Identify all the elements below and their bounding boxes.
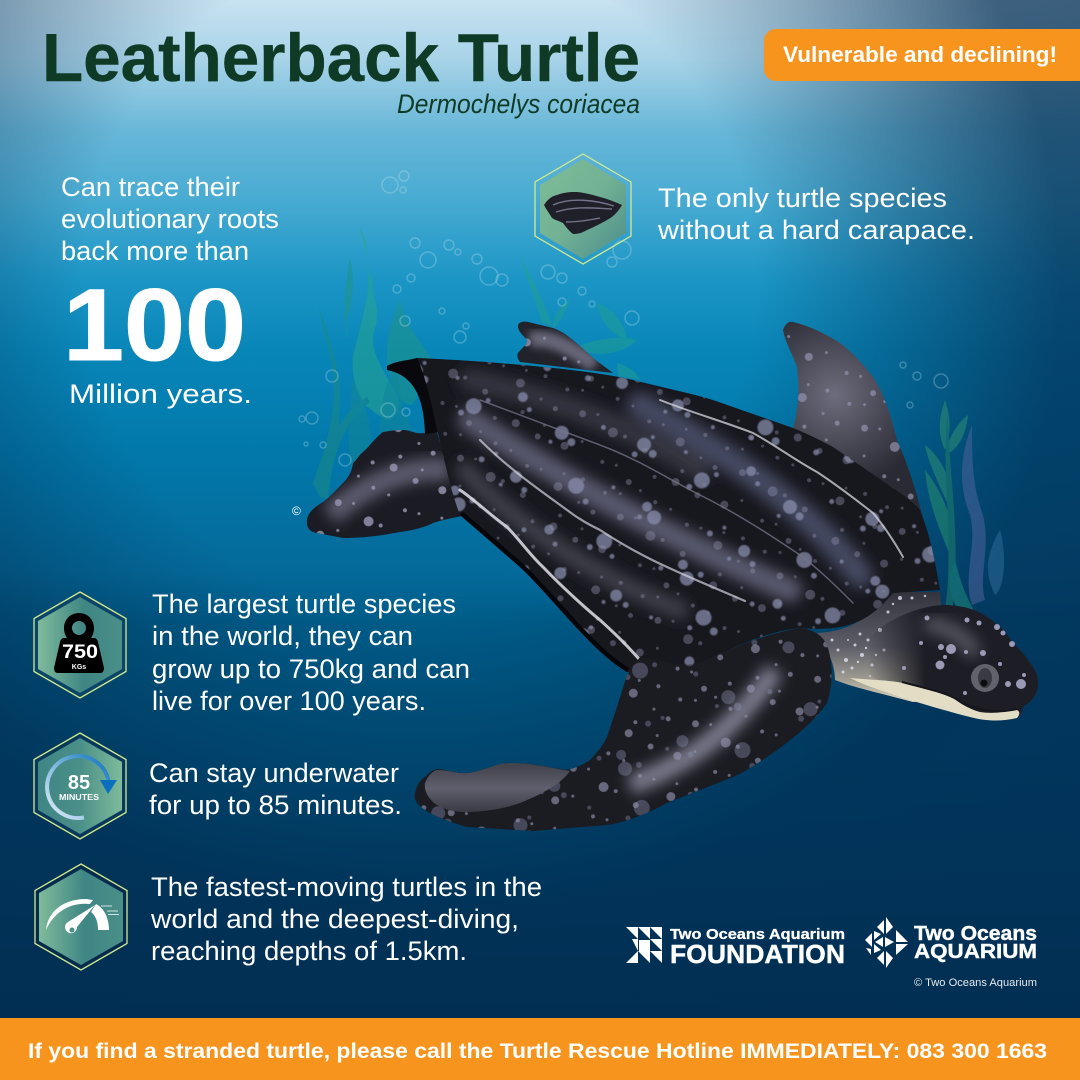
text block: evolutionary roots: [61, 172, 279, 409]
carapace keels: [460, 400, 903, 660]
text block: underwater: for up to 85 minutes.: [149, 790, 402, 820]
copyright mark: ©: [292, 504, 301, 518]
carapace shading bands: [465, 380, 860, 610]
text block: evolutionary roots: evolutionary roots: [61, 204, 279, 234]
logo: Two Oceans Aquarium: [865, 917, 1037, 968]
mouth line: [902, 682, 1017, 711]
rear flipper left: [306, 430, 462, 538]
foundation mark: [626, 927, 662, 963]
text block: largest species: grow up to 750kg and can: [152, 654, 470, 684]
logo: Two Oceans Aquarium Foundation: FOUNDATION: [670, 939, 845, 969]
neck speckles: [830, 595, 926, 677]
text block: largest species: The largest turtle species: [152, 589, 456, 619]
flipper highlight: [630, 670, 775, 785]
text block: largest species: [152, 589, 470, 716]
rear flipper top: [517, 322, 613, 373]
timer arc and arrow: 85: [68, 772, 90, 794]
scientific name: Dermochelys coriacea: [397, 89, 640, 119]
seaweed and bubbles behind the turtle: [299, 171, 1004, 615]
logo: Two Oceans Aquarium: AQUARIUM: [914, 941, 1037, 963]
head highlight: [925, 625, 975, 655]
timer arc and arrow: [47, 756, 117, 818]
timer arc and arrow: MINUTES: [59, 793, 100, 802]
title: Leatherback Turtle: [42, 20, 640, 96]
text block: underwater: [149, 758, 402, 820]
footer hotline banner: If you find a stranded turtle, please call the Turtle Rescue Hotline IMMEDIATELY: 083 300 1663: [28, 1039, 1047, 1063]
eye: [971, 664, 999, 692]
weight shape: 750: [62, 642, 98, 663]
seaweed left: [313, 228, 430, 500]
head spots: [902, 616, 1026, 695]
icon: speedometer hexagon: [35, 864, 127, 970]
front flipper bottom: [414, 628, 832, 831]
seaweed middle: [520, 257, 640, 380]
text block: underwater: Can stay underwater: [149, 758, 399, 788]
weight shape: KGs: [72, 664, 86, 671]
text block: evolutionary roots: Can trace their: [61, 172, 240, 202]
text block: largest species: in the world, they can: [152, 621, 413, 651]
flipper spots: [431, 640, 832, 831]
logo: Two Oceans Aquarium Foundation: Two Oceans Aquarium: [670, 927, 845, 943]
carapace: [410, 350, 950, 680]
footer hotline banner: [0, 1018, 1080, 1080]
carapace specks: [422, 358, 938, 657]
head lower jaw: [850, 678, 1019, 721]
logo: Two Oceans Aquarium: Two Oceans: [914, 923, 1037, 945]
text block: carapace: without a hard carapace.: [657, 215, 975, 245]
text block: fastest and deepest: The fastest-moving turtles in the: [151, 872, 542, 902]
front flipper top: [783, 322, 922, 515]
bubbles: [299, 171, 948, 466]
status tag: Vulnerable and declining!: [783, 42, 1057, 67]
status tag: [764, 29, 1080, 81]
flipper tip: [425, 763, 570, 812]
icon: 750 kg weight hexagon: [34, 592, 126, 698]
text block: evolutionary roots: 100: [63, 268, 246, 382]
icon: 85 minutes hexagon: [34, 733, 126, 839]
text block: largest species: live for over 100 years.: [152, 686, 426, 716]
seaweed right: [925, 400, 1004, 615]
carapace spots: [420, 360, 935, 668]
carapace lower rim: [460, 515, 627, 672]
text block: fastest and deepest: reaching depths of 1.5km.: [151, 936, 467, 966]
copyright line: © Two Oceans Aquarium: [914, 977, 1037, 989]
text block: fastest and deepest: world and the deepest-diving,: [150, 904, 519, 934]
text block: carapace: [657, 183, 975, 245]
text block: evolutionary roots: Million years.: [69, 379, 252, 409]
gauge: [46, 899, 119, 933]
neck: [817, 592, 950, 702]
weight shape: [54, 613, 104, 673]
text block: fastest and deepest: [150, 872, 542, 966]
hook behind carapace: [387, 358, 439, 434]
head: [850, 605, 1038, 721]
logo: Two Oceans Aquarium Foundation: [626, 927, 845, 969]
text block: evolutionary roots: back more than: [61, 236, 249, 266]
icon: carapace hexagon: [535, 154, 631, 264]
text block: carapace: The only turtle species: [658, 183, 947, 213]
fish mark: [865, 917, 908, 968]
leatherback turtle illustration: [300, 315, 1038, 840]
